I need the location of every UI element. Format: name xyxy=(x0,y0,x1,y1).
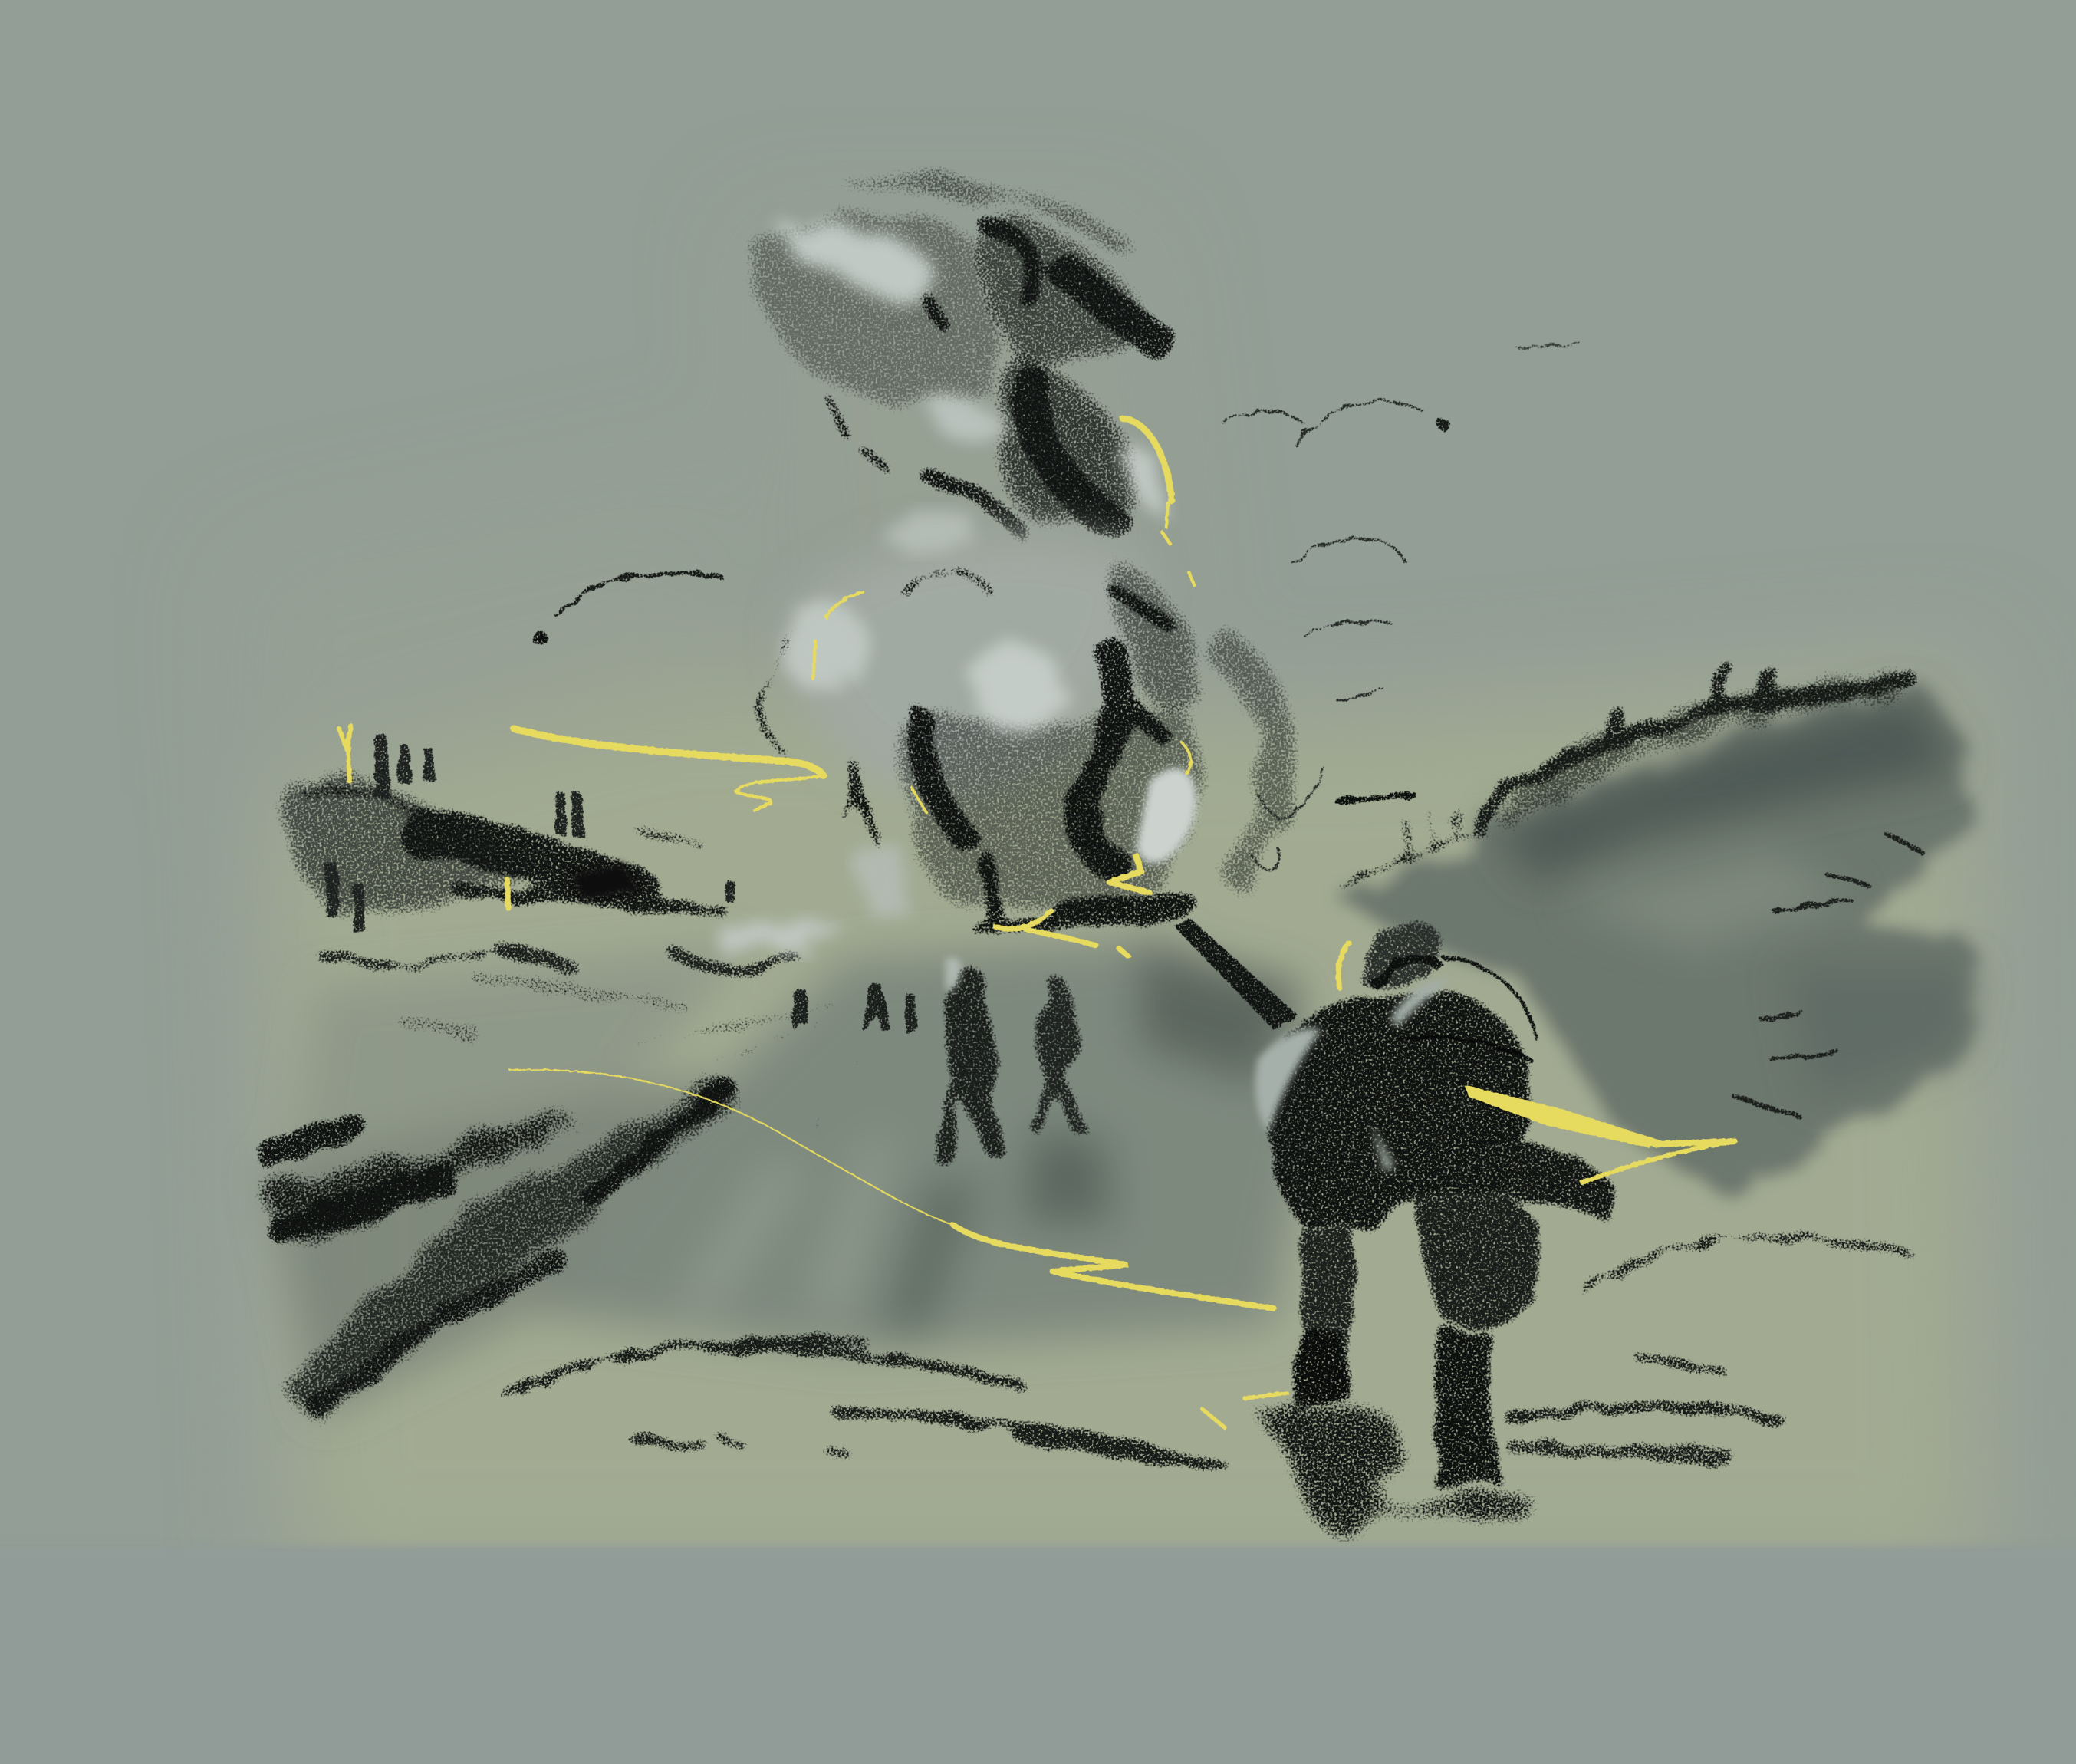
right leg xyxy=(1411,1192,1549,1331)
shadow xyxy=(1238,1401,1541,1542)
debris xyxy=(532,343,1582,801)
left ground grain marks xyxy=(321,828,900,1165)
helmet xyxy=(1357,920,1443,991)
highlights xyxy=(1255,1028,1321,1132)
green paper glow xyxy=(225,225,1986,1589)
distant figures xyxy=(791,982,917,1035)
right hill wash xyxy=(1337,682,1972,1199)
yellow strokes xyxy=(339,419,1735,1427)
body xyxy=(1264,991,1535,1234)
bottom band xyxy=(0,1547,2076,1764)
two standing figures xyxy=(933,957,1094,1168)
main soldier xyxy=(1238,920,1618,1542)
road wash xyxy=(265,940,1324,1417)
trees xyxy=(326,732,733,933)
rifle smear xyxy=(1172,919,1300,1030)
left hill xyxy=(271,732,733,933)
left leg xyxy=(1298,1225,1358,1407)
left foreground streaks xyxy=(258,1075,742,1427)
upper smoke cloud xyxy=(747,182,1166,532)
gun xyxy=(1509,1141,1618,1225)
right hill ridge xyxy=(1337,669,1913,890)
lower smoke mushroom xyxy=(715,402,1423,953)
right hill marks xyxy=(1735,834,1920,1117)
foreground ground strokes xyxy=(505,1238,1913,1467)
